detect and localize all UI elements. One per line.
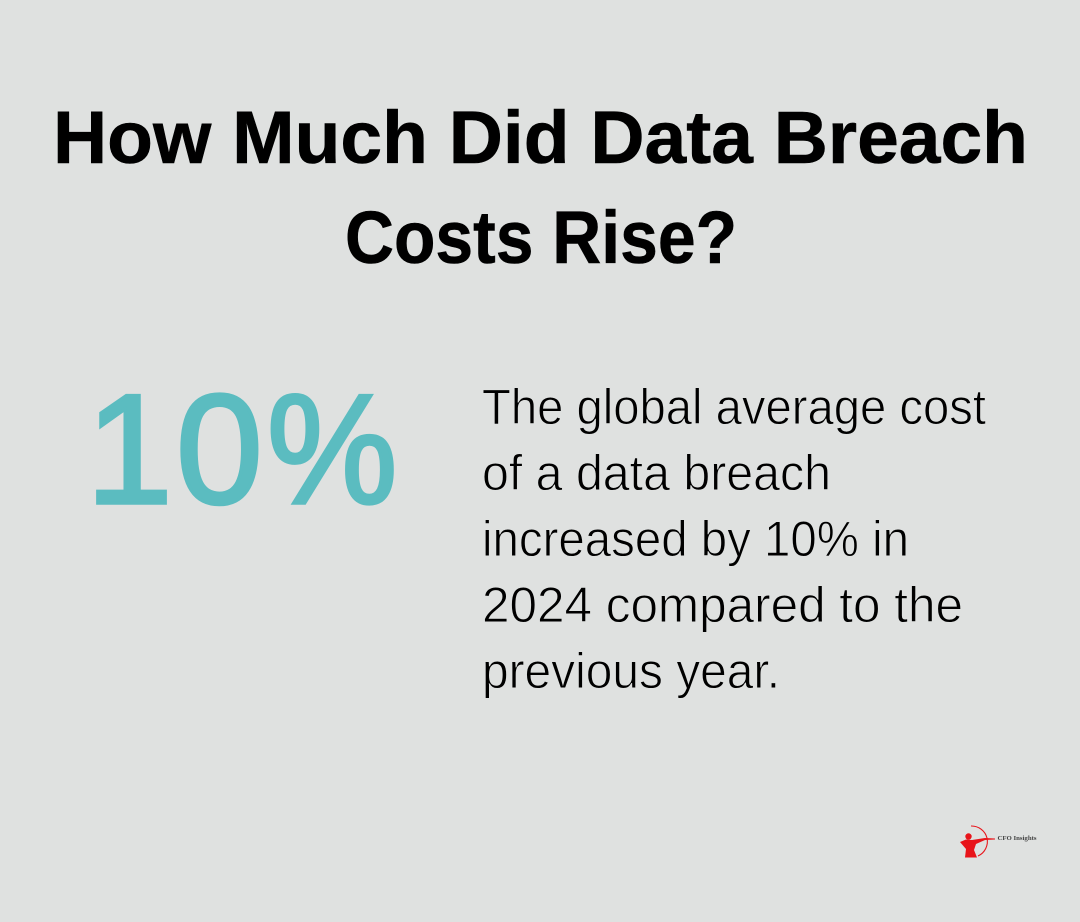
big statistic: 10%: %: [267, 363, 397, 537]
title: How Much Did Data Breach: [53, 96, 1028, 179]
description text: The global average cost: [482, 379, 986, 435]
big statistic: 10%: [86, 363, 397, 537]
title: Costs Rise?: [345, 196, 737, 279]
logo: CFO Insights archer: [960, 826, 1037, 858]
description text: of a data breach: [482, 445, 831, 501]
title: [53, 96, 1028, 279]
description text: increased by 10% in: [482, 511, 909, 567]
description text: previous year.: [482, 643, 780, 699]
big statistic: 10%: 10: [86, 363, 263, 537]
icon: red archer: [960, 826, 995, 858]
description text: 2024 compared to the: [482, 577, 963, 633]
logo text: CFO Insights: [998, 835, 1037, 842]
description text: [482, 379, 986, 699]
